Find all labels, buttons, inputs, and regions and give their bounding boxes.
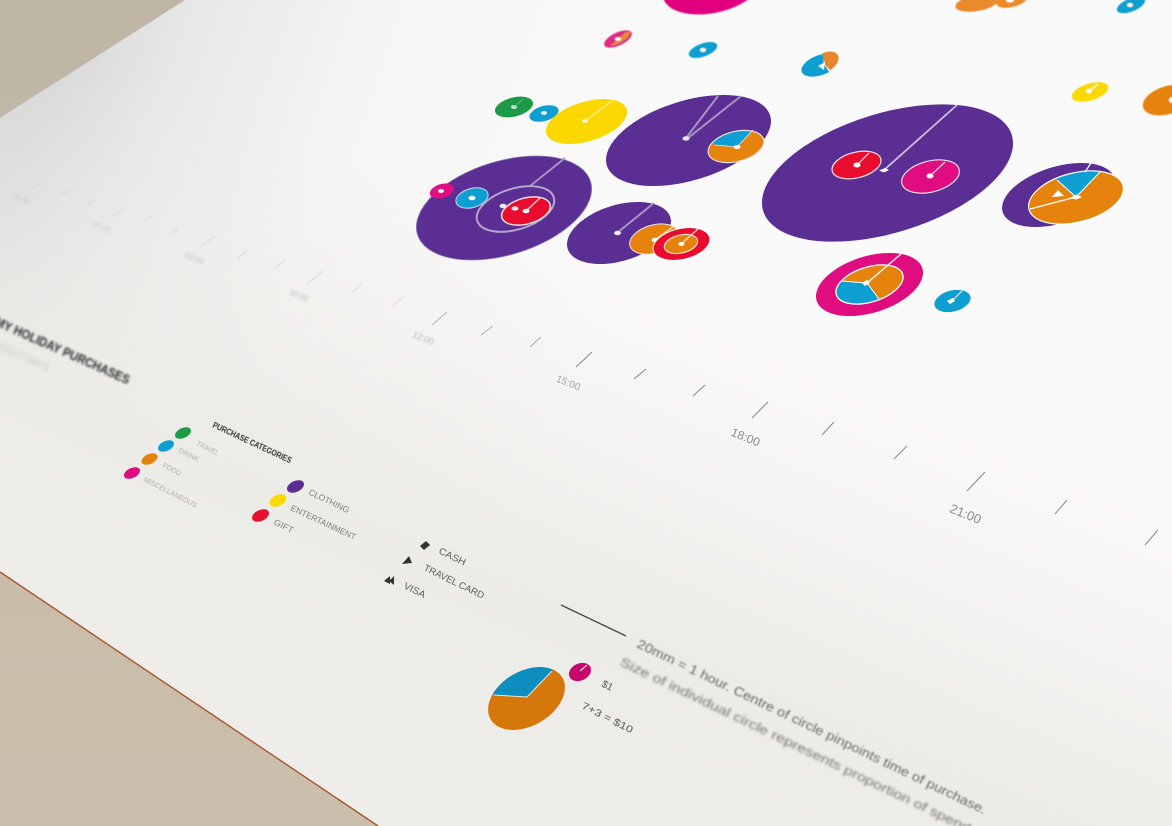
label: one dollar: $1	[600, 679, 615, 694]
pie: 7 plus 3 example	[488, 667, 565, 730]
legend heading: PURCHASE CATEGORIES	[211, 421, 293, 465]
circle: clothing	[595, 77, 782, 204]
circle: miscellaneous	[898, 154, 963, 199]
ring: overlapping outline	[471, 178, 560, 240]
circle: drink	[454, 184, 490, 212]
pie: food and drink	[708, 130, 764, 164]
swatch: travel: TRAVEL	[195, 439, 221, 458]
pie: drink and food	[801, 52, 839, 77]
hour labels: 06:00	[12, 193, 31, 206]
circle: one dollar	[566, 659, 594, 685]
cluster: clothing circle top centre	[606, 95, 771, 186]
hour labels: 07:00	[92, 221, 111, 234]
legend: payment types	[384, 541, 486, 602]
circle: orange right edge	[1139, 79, 1172, 121]
circle: food cropped	[954, 0, 1029, 15]
circle: drink small lower right	[932, 286, 973, 316]
cluster: miscellaneous ring with pie	[816, 253, 923, 316]
hour labels: 21:00	[948, 501, 984, 527]
swatch: entertainment: ENTERTAINMENT	[289, 503, 358, 542]
swatch: entertainment	[268, 492, 358, 542]
circle: clothing	[404, 137, 604, 279]
hour labels: 09:00	[183, 251, 205, 267]
circle: travel	[493, 93, 535, 121]
circle: small drink	[687, 39, 719, 61]
swatch: miscellaneous	[122, 465, 199, 510]
swatch: travel	[173, 425, 221, 458]
legend: purchase categories	[122, 421, 358, 542]
circle: miscellaneous	[428, 181, 456, 201]
pin lines	[686, 96, 741, 138]
title block	[0, 314, 133, 387]
hour labels: 10:00	[288, 288, 310, 304]
circle: drink	[528, 102, 560, 125]
icon: cash diamond: CASH	[437, 546, 468, 568]
swatch: food: FOOD	[161, 461, 183, 478]
circle: gift	[498, 192, 554, 230]
swatch: food	[140, 451, 183, 478]
cluster: largest clothing circle	[746, 78, 1029, 268]
circle: small mixed	[602, 27, 634, 51]
circle: gift ring with food	[650, 222, 713, 266]
swatch: miscellaneous: MISCELLANEOUS	[142, 475, 199, 510]
scale description text	[618, 637, 993, 826]
cluster: clothing with food and drink pie, right	[1002, 163, 1123, 227]
value key	[488, 662, 633, 732]
cluster: large clothing circle left	[404, 137, 604, 279]
circle: miscellaneous	[808, 241, 931, 328]
pie: drink and food	[835, 254, 904, 305]
hour labels	[12, 193, 984, 527]
swatch: clothing: CLOTHING	[307, 487, 351, 515]
circle: clothing	[559, 191, 679, 275]
time axis ticks and hour labels	[12, 182, 1158, 545]
hour labels: 15:00	[554, 374, 582, 394]
pie: food and drink	[1028, 164, 1123, 225]
circle: clothing	[994, 151, 1123, 239]
swatch: gift	[250, 507, 295, 535]
icon: travel card triangle: TRAVEL CARD	[422, 563, 486, 602]
cluster: small clothing with food and gift	[559, 191, 713, 275]
scale bar	[561, 605, 626, 636]
hour labels: 12:00	[411, 329, 435, 347]
swatch: drink: DRINK	[177, 446, 201, 464]
swatch: gift: GIFT	[272, 517, 295, 535]
cluster: green blue yellow	[493, 90, 632, 153]
top row partial circles	[602, 0, 1172, 121]
swatch: clothing	[285, 478, 351, 515]
circle: drink cropped	[1115, 0, 1147, 17]
circle: food	[626, 219, 682, 259]
circle: miscellaneous cropped	[658, 0, 766, 23]
circle: entertainment	[541, 90, 632, 153]
pins	[500, 204, 518, 211]
near ticks	[432, 312, 1158, 545]
label: seven plus three: 7+3 = $10	[580, 701, 635, 736]
hour labels: 18:00	[729, 425, 762, 450]
swatch: drink	[156, 438, 201, 464]
circle: clothing	[746, 78, 1029, 268]
icon: visa double triangle: VISA	[402, 581, 428, 601]
caption line two: Size of individual circle represents proportion of spend on	[618, 655, 993, 826]
circle: gift	[829, 147, 884, 183]
faint far-left ticks	[30, 182, 403, 306]
caption line one: 20mm = 1 hour. Centre of circle pinpoints time of purchase.	[635, 637, 989, 817]
circle: yellow right	[1069, 78, 1111, 106]
